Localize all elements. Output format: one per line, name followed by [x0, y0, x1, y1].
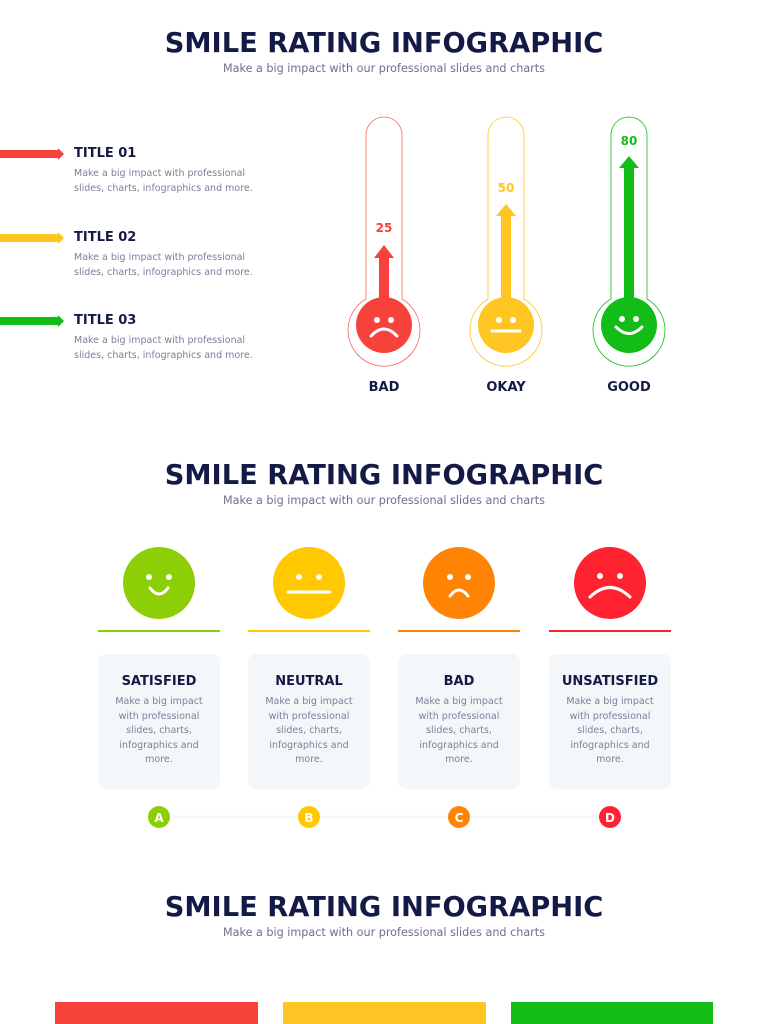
- bottom bars: [55, 1002, 713, 1024]
- card bad: Make a big impact with professional slides, charts, infographics and more.: [415, 696, 503, 765]
- label good: GOOD: [607, 380, 651, 395]
- thermometer: bad 25: 25: [376, 221, 392, 235]
- card unsatisfied: UNSATISFIED: [562, 674, 658, 689]
- card unsatisfied: Make a big impact with professional slides, charts, infographics and more.: [566, 696, 654, 765]
- thermometer: good 80: [593, 117, 665, 366]
- list item 3: [0, 313, 253, 360]
- thermometer: okay 50: [470, 117, 542, 366]
- list item 1: Make a big impact with professional slides, charts, infographics and more.: [74, 168, 253, 194]
- marker A: [148, 806, 170, 828]
- marker B: B: [304, 811, 314, 825]
- thermometer: good 80: 80: [621, 134, 637, 148]
- thermometer: okay 50: 50: [498, 181, 514, 195]
- card bad: [398, 654, 520, 789]
- card satisfied: SATISFIED: [122, 674, 196, 689]
- card neutral: NEUTRAL: [275, 674, 343, 689]
- list item 2: [0, 230, 253, 278]
- card bad: BAD: [444, 674, 474, 689]
- thermometers chart: [348, 116, 666, 367]
- label okay: OKAY: [486, 380, 526, 395]
- list item 3: TITLE 03: [74, 313, 136, 328]
- card neutral: [248, 654, 370, 789]
- marker C: [448, 806, 470, 828]
- list item 3: Make a big impact with professional slides, charts, infographics and more.: [74, 335, 253, 360]
- marker D: D: [605, 811, 615, 825]
- subtitle 2: Make a big impact with our professional slides and charts: [223, 494, 545, 507]
- marker D: [599, 806, 621, 828]
- faces row: [98, 547, 671, 828]
- card unsatisfied: [549, 654, 671, 789]
- card satisfied: Make a big impact with professional slides, charts, infographics and more.: [115, 696, 203, 765]
- card satisfied: [98, 654, 220, 789]
- marker A: A: [154, 811, 164, 825]
- face bad: [398, 547, 520, 631]
- marker B: [298, 806, 320, 828]
- face unsatisfied: [549, 547, 671, 631]
- timeline line: [159, 816, 610, 818]
- thermometer: bad 25: [348, 117, 420, 366]
- title 3: SMILE RATING INFOGRAPHIC: [165, 892, 603, 923]
- list item 1: TITLE 01: [74, 146, 136, 161]
- title 2: SMILE RATING INFOGRAPHIC: [165, 460, 603, 491]
- list item 1: [0, 146, 253, 194]
- subtitle 3: Make a big impact with our professional slides and charts: [223, 926, 545, 939]
- list item 2: Make a big impact with professional slides, charts, infographics and more.: [74, 252, 253, 278]
- face satisfied: [98, 547, 220, 631]
- card neutral: Make a big impact with professional slides, charts, infographics and more.: [265, 696, 353, 765]
- subtitle 1: Make a big impact with our professional slides and charts: [223, 62, 545, 75]
- title 1: SMILE RATING INFOGRAPHIC: [165, 28, 603, 59]
- marker C: C: [455, 811, 464, 825]
- list item 2: TITLE 02: [74, 230, 136, 245]
- label bad: BAD: [369, 380, 399, 395]
- face neutral: [248, 547, 370, 631]
